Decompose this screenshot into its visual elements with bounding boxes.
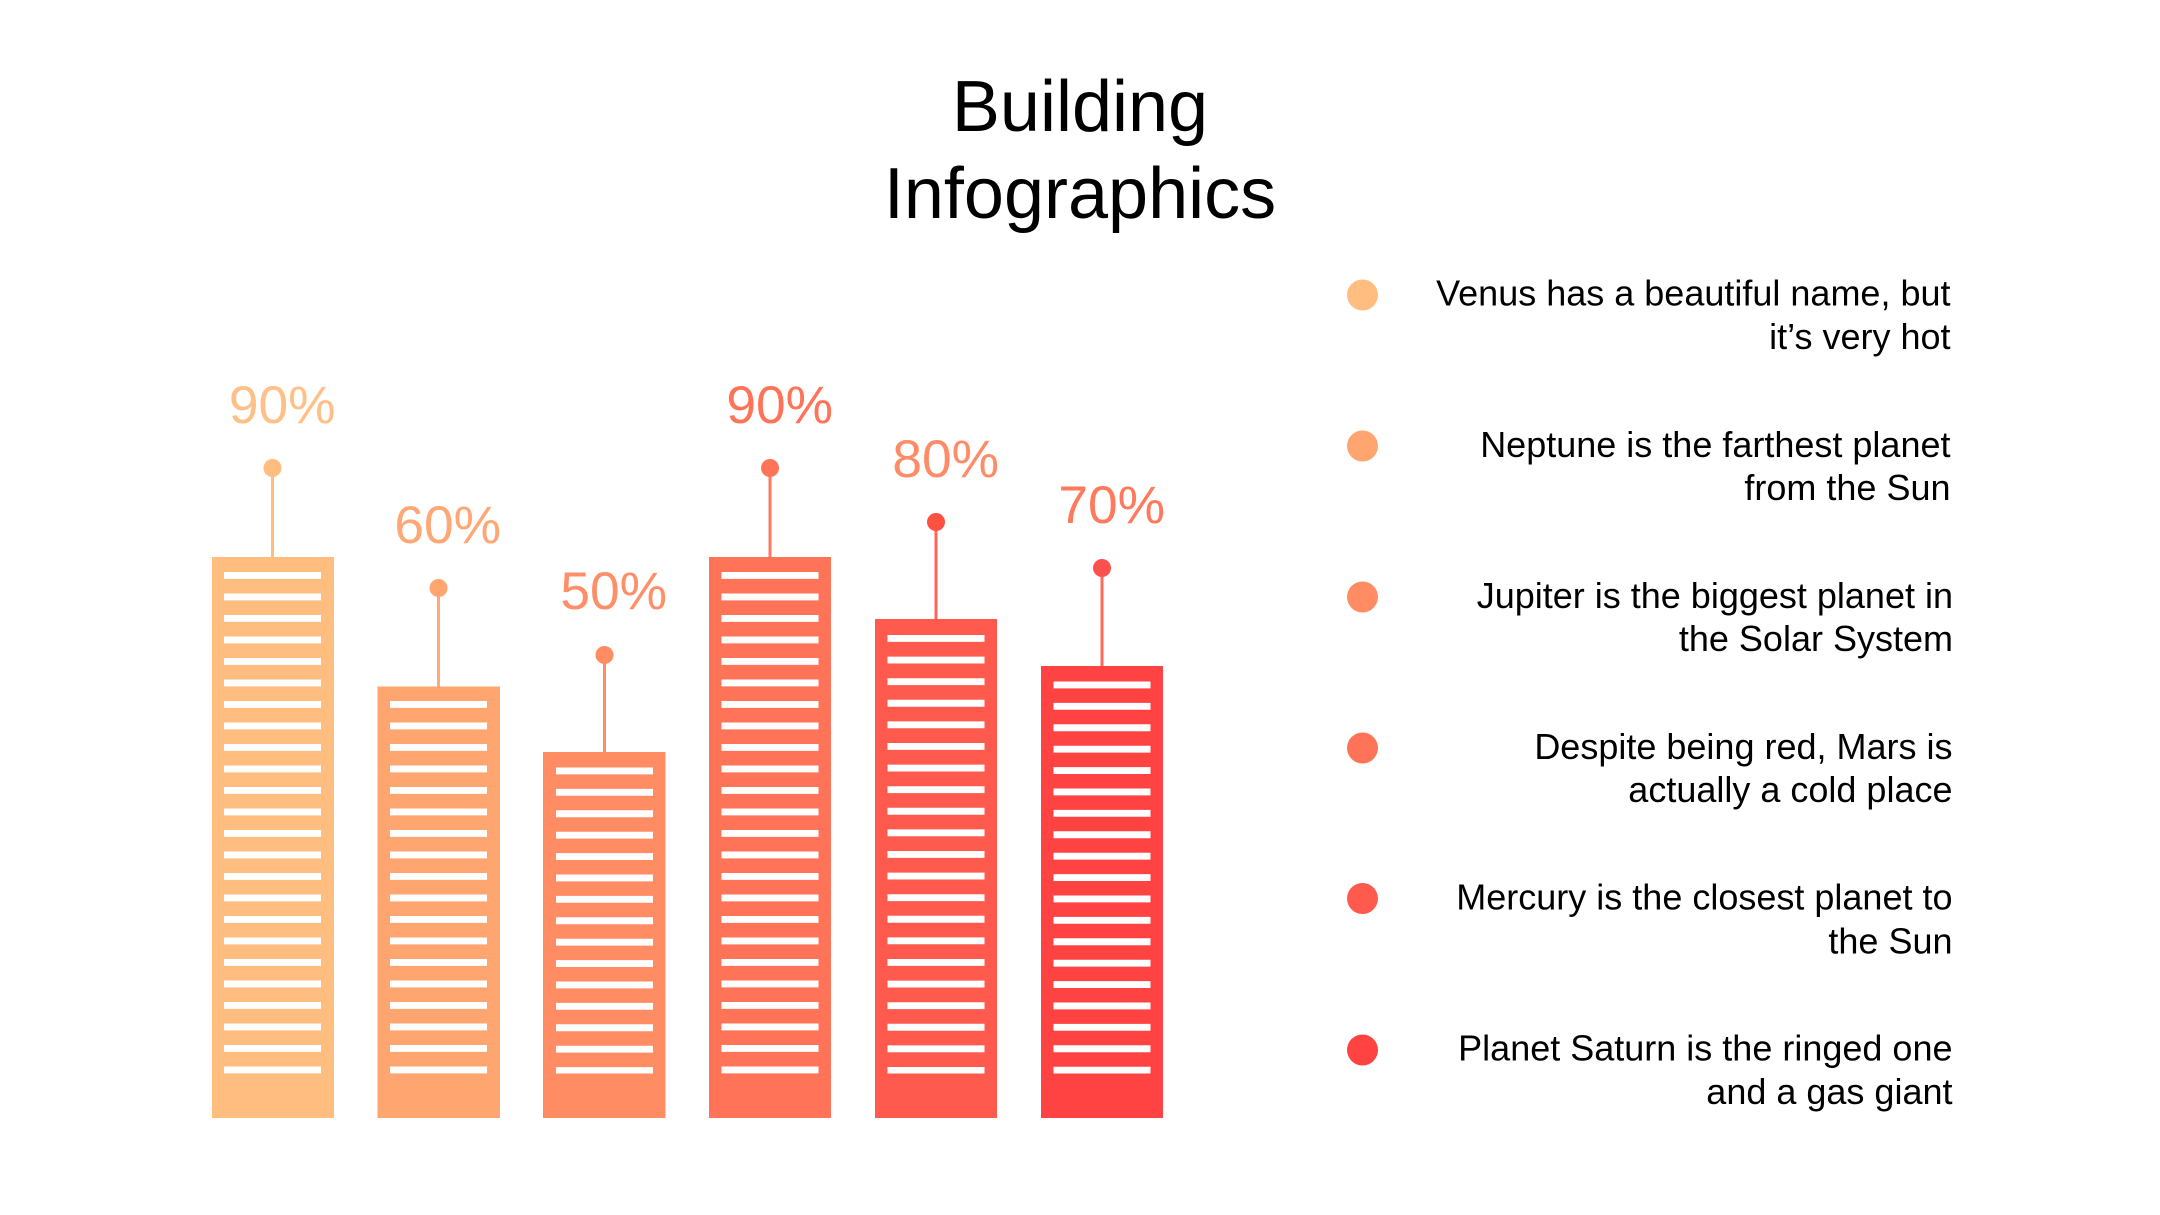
- bar 4: 90%: 90%: [726, 376, 833, 435]
- legend item: Mercury: the Sun: [1828, 920, 1952, 962]
- legend item: Mars: actually a cold place: [1628, 769, 1952, 810]
- bar 5: 80%: 80%: [892, 430, 999, 489]
- legend item: Jupiter: the Solar System: [1679, 618, 1953, 659]
- title: Infographics: [884, 154, 1276, 234]
- legend item: Jupiter: Jupiter is the biggest planet in: [1477, 575, 1953, 616]
- legend item: Saturn: Planet Saturn is the ringed one: [1458, 1028, 1952, 1068]
- bar 1: 90%: 90%: [229, 376, 336, 435]
- bar 6: 70%: [1041, 476, 1165, 1118]
- legend item: Neptune: Neptune is the farthest planet: [1480, 424, 1950, 465]
- title: [884, 67, 1276, 234]
- bar 3: 50%: [543, 562, 667, 1118]
- legend item: Neptune: [1347, 424, 1950, 508]
- bar 2: 60%: [378, 496, 501, 1118]
- bar 2: 60%: 60%: [394, 496, 501, 555]
- legend item: Jupiter: [1347, 575, 1953, 659]
- legend item: Mars: [1347, 726, 1952, 810]
- legend item: Mercury: Mercury is the closest planet to: [1456, 876, 1952, 918]
- legend item: Saturn: [1347, 1028, 1952, 1112]
- legend item: Venus: [1347, 272, 1950, 357]
- legend item: Mars: Despite being red, Mars is: [1534, 726, 1952, 767]
- legend item: Saturn: and a gas giant: [1706, 1071, 1952, 1112]
- legend: [1347, 272, 1953, 1112]
- legend item: Venus: Venus has a beautiful name, but: [1436, 272, 1950, 314]
- legend item: Venus: it’s very hot: [1769, 316, 1950, 357]
- title: Building: [952, 67, 1208, 147]
- legend item: Mercury: [1347, 876, 1952, 962]
- bar 4: 90%: [709, 376, 833, 1118]
- bar 3: 50%: 50%: [560, 562, 667, 621]
- bar 5: 80%: [875, 430, 999, 1118]
- bar 6: 70%: 70%: [1058, 476, 1165, 535]
- legend item: Neptune: from the Sun: [1744, 467, 1950, 508]
- bar 1: 90%: [212, 376, 336, 1118]
- bar chart: [212, 376, 1165, 1118]
